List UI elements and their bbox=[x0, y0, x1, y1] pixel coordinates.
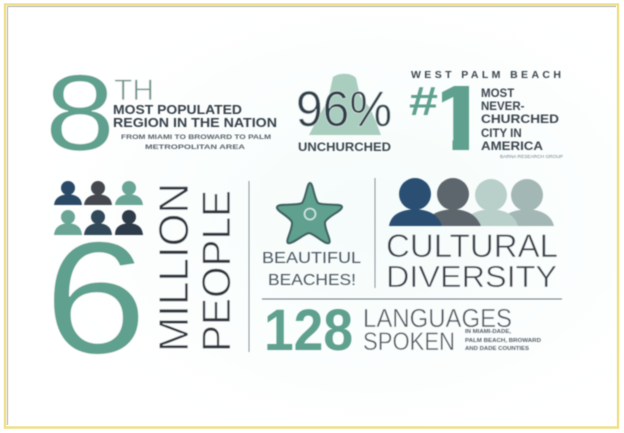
label beaches: BEACHES! bbox=[268, 272, 356, 289]
stat: #1 never-churched city bbox=[409, 66, 563, 170]
numeral 6: 6 bbox=[44, 208, 147, 387]
stat: 6 million people bbox=[44, 181, 239, 387]
source note: BARNA RESEARCH GROUP bbox=[500, 154, 563, 159]
heading: region in the nation: REGION IN THE NATION bbox=[113, 116, 277, 130]
label unchurched: UNCHURCHED bbox=[298, 142, 391, 154]
label west palm beach: WEST PALM BEACH bbox=[411, 69, 561, 81]
person 5 bbox=[84, 210, 112, 235]
description lines: CITY IN bbox=[481, 128, 522, 140]
stat: 8th most populated bbox=[45, 52, 277, 173]
person 6 bbox=[115, 210, 143, 235]
label diversity: DIVERSITY bbox=[386, 259, 557, 294]
note lines: IN MIAMI-DADE, bbox=[465, 329, 512, 335]
person light 3 bbox=[462, 179, 518, 226]
stat: 96% unchurched bbox=[296, 74, 392, 154]
label people: PEOPLE bbox=[195, 190, 239, 352]
numeral 8: 8 bbox=[45, 52, 115, 173]
icon: six people bbox=[54, 181, 143, 235]
description lines: AMERICA bbox=[481, 141, 543, 153]
stat: beautiful beaches bbox=[262, 183, 361, 289]
figure 128: 128 bbox=[264, 298, 353, 363]
person blue 1 bbox=[389, 178, 442, 226]
hash sign: # bbox=[409, 78, 438, 124]
numeral 1: 1 bbox=[426, 66, 491, 170]
person light 4 bbox=[498, 179, 554, 226]
label cultural: CULTURAL bbox=[386, 228, 558, 264]
heading: most populated: MOST POPULATED bbox=[113, 103, 242, 117]
note: metro area: METROPOLITAN AREA bbox=[145, 145, 246, 151]
person 3 bbox=[115, 181, 143, 205]
person 2 bbox=[84, 181, 112, 205]
label million: MILLION bbox=[150, 183, 197, 352]
person gray 2 bbox=[424, 178, 481, 226]
stat: cultural diversity bbox=[386, 178, 558, 294]
stat: 128 languages bbox=[264, 298, 541, 363]
map shape bbox=[309, 74, 381, 135]
TH suffix: TH bbox=[114, 74, 154, 107]
description lines bbox=[481, 88, 559, 153]
description lines: NEVER- bbox=[481, 101, 525, 113]
note: metro area bbox=[121, 135, 271, 151]
label beautiful: BEAUTIFUL bbox=[262, 250, 361, 267]
note lines: AND DADE COUNTIES bbox=[465, 346, 529, 352]
label spoken: SPOKEN bbox=[363, 328, 455, 356]
description lines: MOST bbox=[481, 88, 514, 100]
person 1 bbox=[54, 181, 82, 205]
icon: four people bbox=[389, 178, 554, 226]
figure 96%: 96% bbox=[296, 81, 392, 137]
description lines: CHURCHED bbox=[481, 114, 559, 126]
note lines bbox=[465, 329, 541, 352]
label languages: LANGUAGES bbox=[363, 303, 512, 333]
person 4 bbox=[54, 210, 82, 235]
note lines: PALM BEACH, BROWARD bbox=[465, 338, 541, 344]
icon: starfish bbox=[277, 183, 342, 243]
note: metro area: FROM MIAMI TO BROWARD TO PALM bbox=[121, 135, 271, 141]
